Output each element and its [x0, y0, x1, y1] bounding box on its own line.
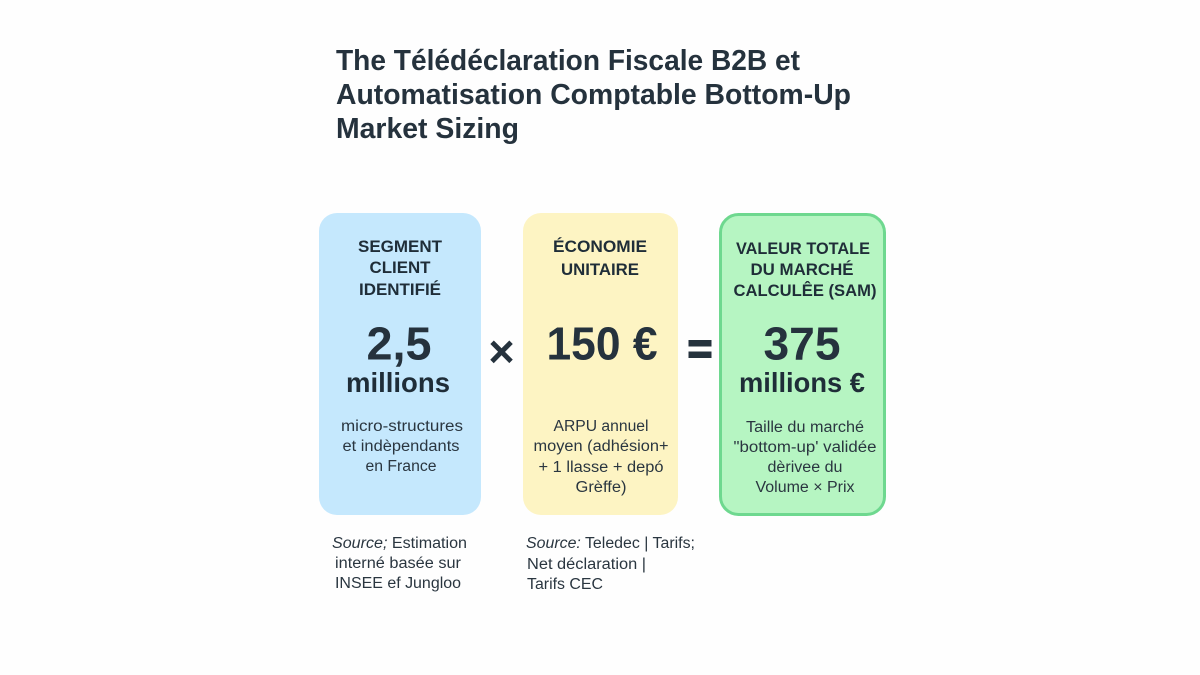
description: valeur totale: Taille du marché: [746, 419, 864, 436]
panel heading: valeur totale: VALEUR TOTALE: [736, 239, 870, 258]
metric: 375 millions €: millions €: [739, 367, 865, 398]
operator: multiply: ×: [488, 326, 515, 377]
panel heading: valeur totale: DU MARCHÉ: [750, 260, 854, 279]
description: économie unitaire: Grèffe): [576, 479, 626, 496]
panel: segment client: [319, 213, 481, 515]
source note: économie unitaire: Net déclaration |: [527, 556, 646, 573]
metric: 375 millions €: 375: [764, 318, 840, 370]
title: The Télédéclaration Fiscale B2B et: [336, 45, 800, 77]
title: [336, 45, 851, 145]
panel heading: segment client: CLIENT: [370, 258, 431, 277]
panel heading: segment client: IDENTIFIÉ: [359, 280, 441, 299]
source note: segment client: INSEE ef Jungloo: [335, 575, 461, 592]
description: segment client: micro-structures: [341, 418, 463, 435]
panel heading: économie unitaire: UNITAIRE: [561, 260, 639, 279]
metric: 2,5 millions: millions: [346, 367, 450, 398]
panel heading: segment client: [358, 237, 443, 299]
source note: segment client: interné basée sur: [335, 555, 461, 572]
operator: equals: [688, 340, 712, 358]
source note: économie unitaire: Source: Teledec | Tarifs;: [526, 535, 695, 552]
source note: économie unitaire: Tarifs CEC: [527, 576, 603, 593]
source note: économie unitaire: [526, 535, 695, 593]
title: Market Sizing: [336, 113, 519, 145]
panel heading: économie unitaire: ÉCONOMIE: [553, 237, 647, 256]
metric: 150 €: 150 €: [546, 318, 658, 370]
panel heading: économie unitaire: [553, 237, 647, 279]
metric: 375 millions €: [739, 318, 865, 398]
panel heading: segment client: SEGMENT: [358, 237, 443, 256]
description: segment client: et indèpendants: [342, 438, 460, 455]
metric: 2,5 millions: 2,5: [366, 318, 432, 370]
description: valeur totale: dèrivee du: [768, 459, 842, 476]
panel heading: valeur totale: [734, 239, 876, 300]
description: économie unitaire: [534, 418, 668, 496]
description: segment client: en France: [366, 458, 436, 475]
panel: valeur totale du marché: [720, 214, 884, 514]
panel heading: valeur totale: CALCULÊE (SAM): [734, 281, 876, 300]
description: économie unitaire: + 1 llasse + depó: [538, 459, 664, 476]
description: valeur totale: [734, 419, 876, 496]
description: économie unitaire: moyen (adhésion+: [534, 438, 668, 455]
description: valeur totale: "bottom-up' validée: [734, 439, 876, 456]
metric: 2,5 millions: [346, 318, 450, 398]
description: économie unitaire: ARPU annuel: [554, 418, 648, 435]
description: valeur totale: Volume × Prix: [756, 479, 855, 496]
description: segment client: [341, 418, 463, 475]
source note: segment client: Source; Estimation: [332, 535, 467, 552]
panel: économie unitaire: [523, 213, 678, 515]
title: Automatisation Comptable Bottom-Up: [336, 79, 851, 111]
source note: segment client: [332, 535, 467, 592]
